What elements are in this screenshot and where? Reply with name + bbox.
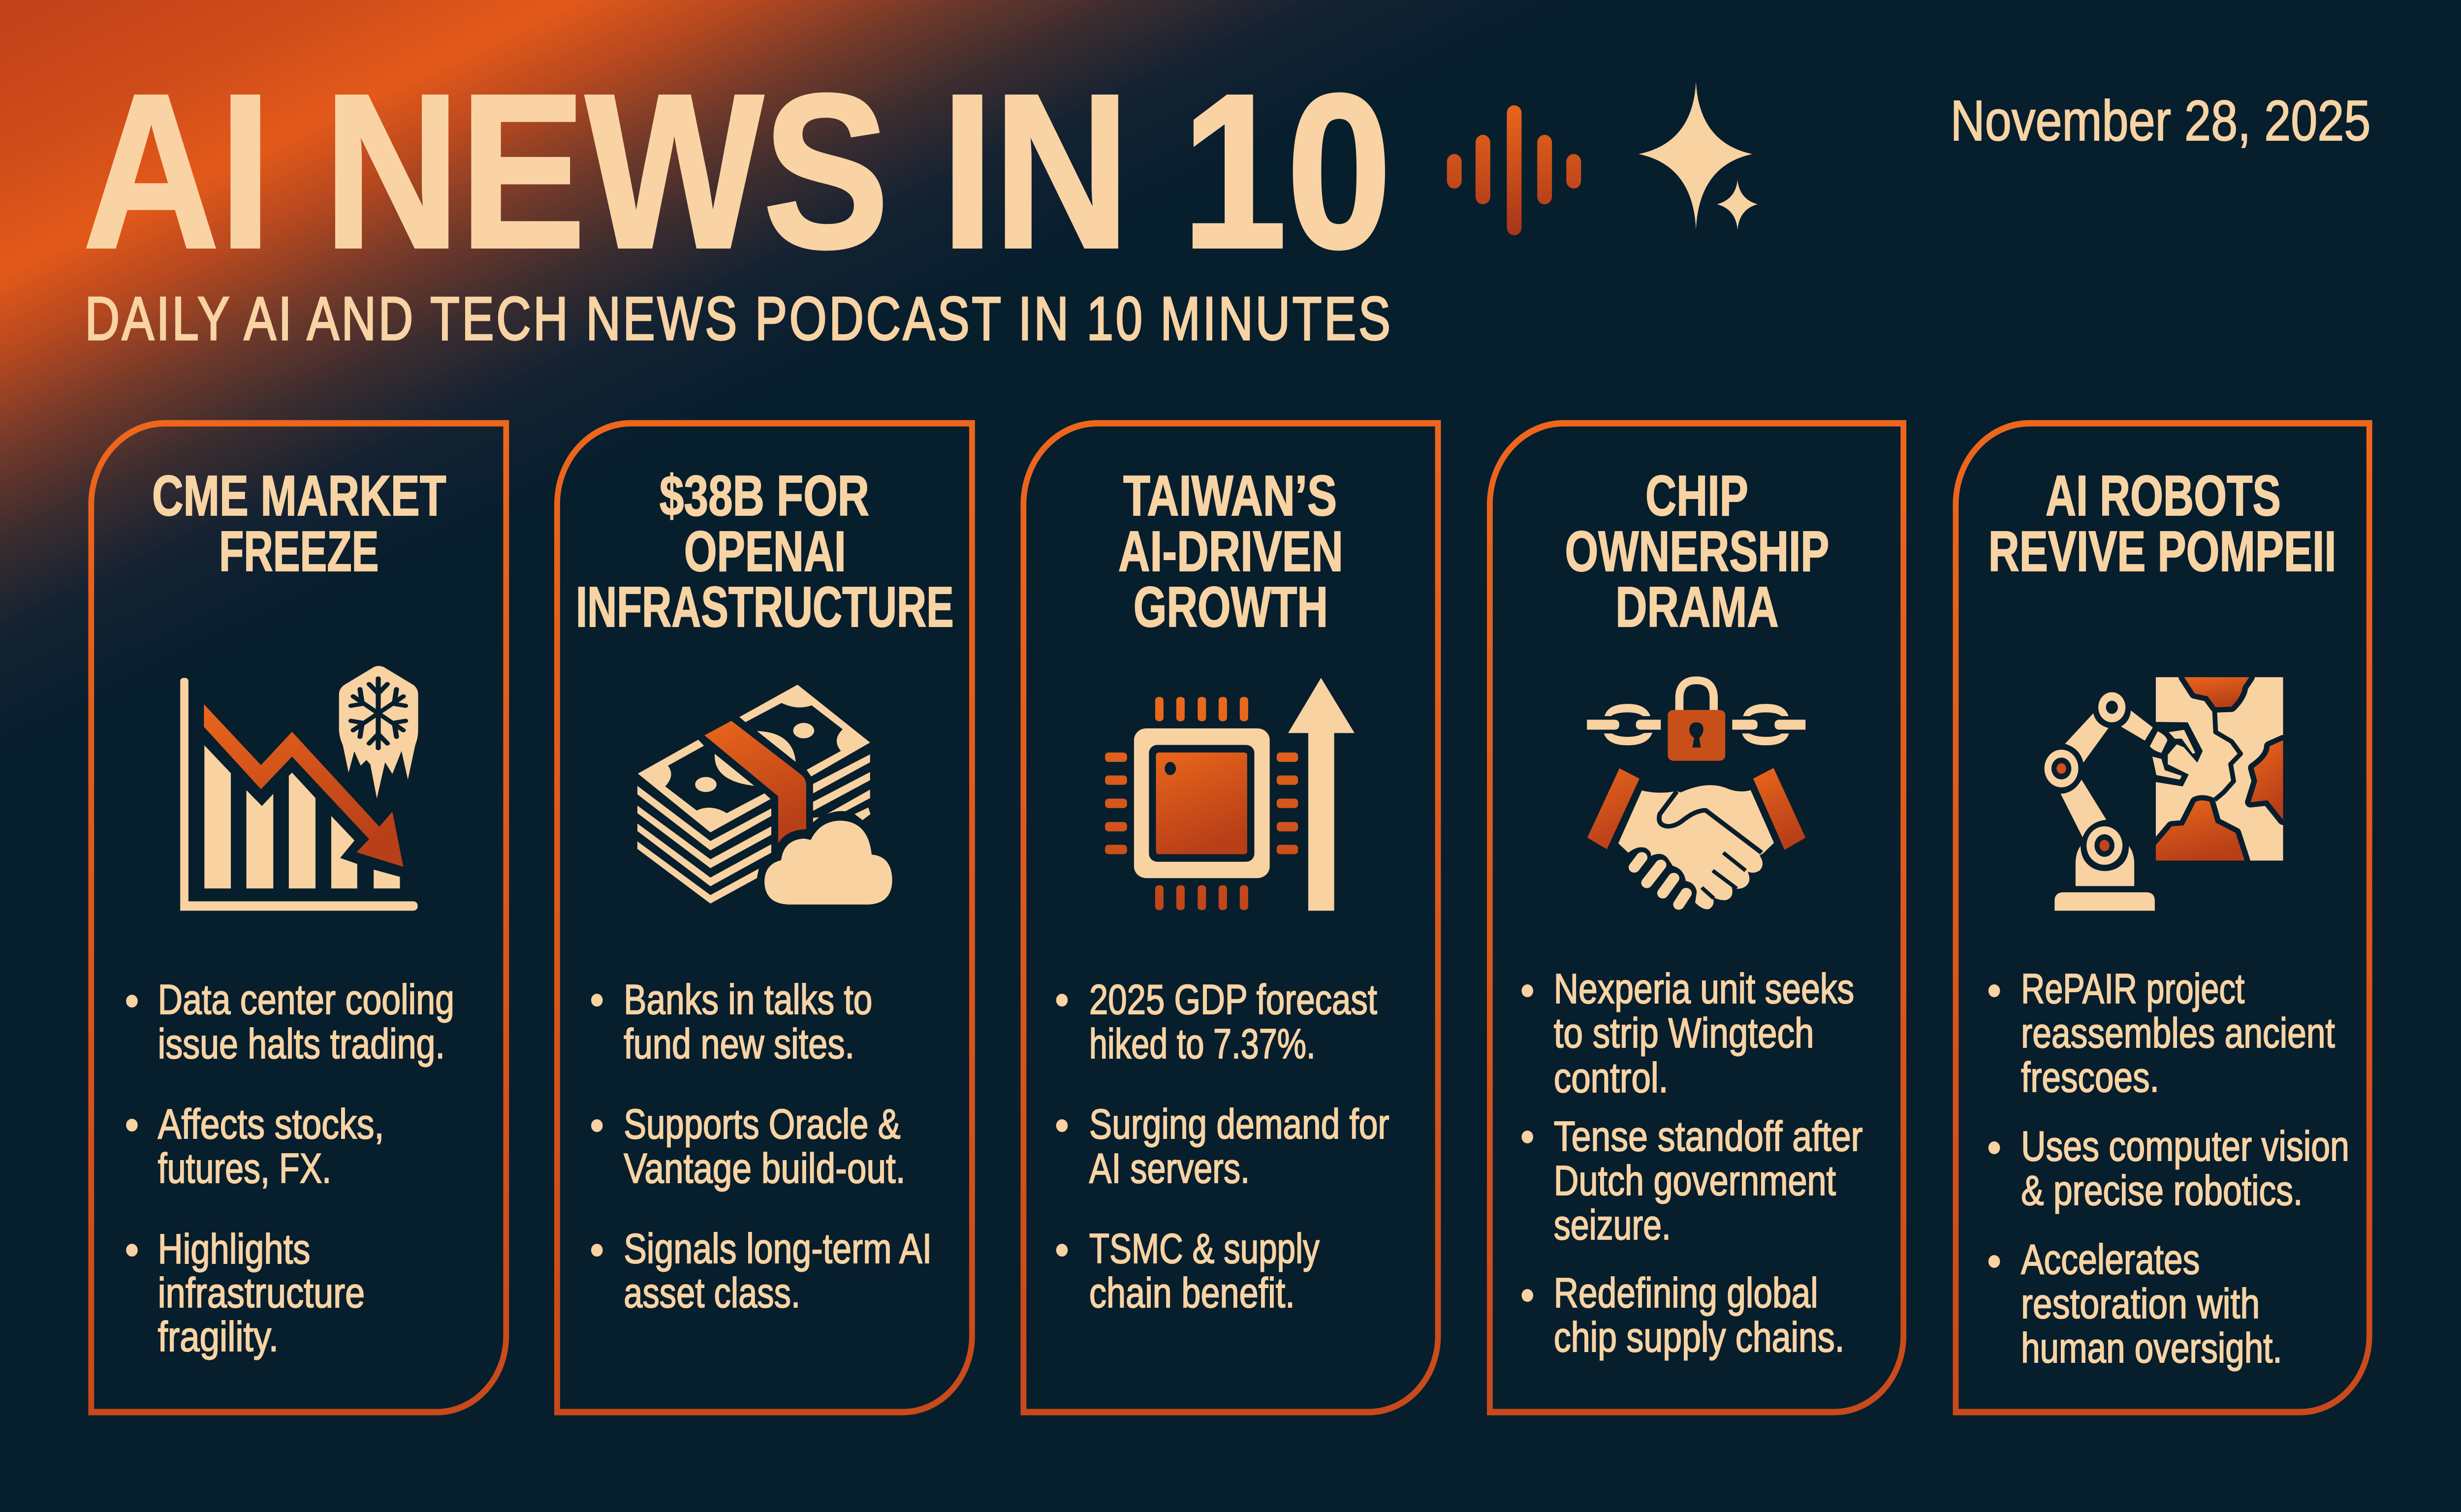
bullet list [591,976,932,1317]
bullet list: AI servers. [1089,1145,1250,1192]
icon: money stack and cloud [637,685,892,905]
heading: chip ownership drama [1565,464,1829,639]
bullet list: control. [1554,1055,1668,1102]
heading: Taiwan's AI-driven growth [1118,464,1343,639]
bullet list: Banks in talks to [624,976,872,1023]
heading: AI robots revive Pompeii: AI ROBOTS [2046,464,2281,528]
panel: Taiwan's AI-driven growth [1023,423,1438,1412]
bullet list: seizure. [1554,1202,1671,1249]
bullet list: Data center cooling [158,976,454,1023]
heading: Taiwan's AI-driven growth: TAIWAN’S [1123,464,1337,528]
heading: $38B for OpenAI infrastructure [576,464,954,639]
bullet list: chain benefit. [1089,1270,1295,1317]
bullet list: futures, FX. [158,1145,331,1192]
heading: chip ownership drama: DRAMA [1615,575,1779,639]
bullet list: Vantage build-out. [624,1145,906,1192]
icon: chain lock and handshake [1587,680,1805,909]
heading: $38B for OpenAI infrastructure: INFRASTRUCTURE [576,575,954,639]
bullet list: Nexperia unit seeks [1554,966,1854,1012]
bullet list: Surging demand for [1089,1101,1389,1148]
bullet list: asset class. [624,1270,800,1317]
bullet list: TSMC & supply [1089,1226,1320,1272]
bullet list: hiked to 7.37%. [1089,1021,1316,1068]
bullet list: human oversight. [2021,1325,2282,1372]
bullet list: fund new sites. [624,1021,854,1068]
bullet list: Accelerates [2021,1236,2200,1283]
bullet list: & precise robotics. [2021,1167,2303,1214]
bullet list: chip supply chains. [1554,1314,1844,1361]
bullet list: RePAIR project [2021,966,2244,1012]
icon: falling chart with frozen snowflake [180,666,418,911]
bullet list: fragility. [158,1314,279,1360]
icon: sparkle stars [1639,82,1758,230]
subtitle: DAILY AI AND TECH NEWS PODCAST IN 10 MINUTES [85,285,1393,353]
icon: robot arm restoring fresco [2045,668,2291,911]
bullet list: Supports Oracle & [624,1101,901,1148]
heading: CME market freeze: CME MARKET [152,464,446,528]
icon: audio waveform [1447,105,1581,235]
heading: chip ownership drama: CHIP [1645,464,1748,528]
heading: $38B for OpenAI infrastructure: OPENAI [684,520,846,583]
bullet list: Affects stocks, [158,1101,384,1148]
bullet list: frescoes. [2021,1054,2159,1101]
bullet list: Redefining global [1554,1270,1818,1317]
icon: chip with up arrow [1105,678,1355,911]
heading: AI robots revive Pompeii [1988,464,2336,583]
heading: $38B for OpenAI infrastructure: $38B FOR [660,464,869,528]
bullet list: Signals long-term AI [624,1226,932,1272]
heading: AI robots revive Pompeii: REVIVE POMPEII [1988,520,2336,583]
heading: CME market freeze [152,464,446,583]
bullet list: Highlights [158,1226,310,1273]
panel: CME market freeze [91,423,506,1412]
panel: AI robots revive Pompeii [1956,423,2369,1412]
title: AI NEWS IN 10 [83,49,1391,294]
bullet list: infrastructure [158,1270,365,1317]
bullet list [1056,976,1389,1317]
bullet list [1988,966,2349,1372]
bullet list: Uses computer vision [2021,1123,2349,1170]
bullet list: 2025 GDP forecast [1089,976,1377,1023]
bullet list [126,976,454,1360]
bullet list: Tense standoff after [1554,1113,1863,1160]
heading: chip ownership drama: OWNERSHIP [1565,520,1829,583]
panel: chip ownership drama [1490,423,1903,1412]
bullet list [1521,966,1863,1361]
bullet list: to strip Wingtech [1554,1010,1814,1057]
date: November 28, 2025 [1951,89,2370,153]
bullet list: issue halts trading. [158,1021,445,1068]
bullet list: restoration with [2021,1281,2260,1327]
heading: Taiwan's AI-driven growth: GROWTH [1134,575,1328,639]
panel: $38B for OpenAI infrastructure [557,423,972,1412]
bullet list: reassembles ancient [2021,1010,2335,1057]
heading: CME market freeze: FREEZE [219,520,379,583]
heading: Taiwan's AI-driven growth: AI-DRIVEN [1118,520,1343,583]
bullet list: Dutch government [1554,1158,1836,1204]
